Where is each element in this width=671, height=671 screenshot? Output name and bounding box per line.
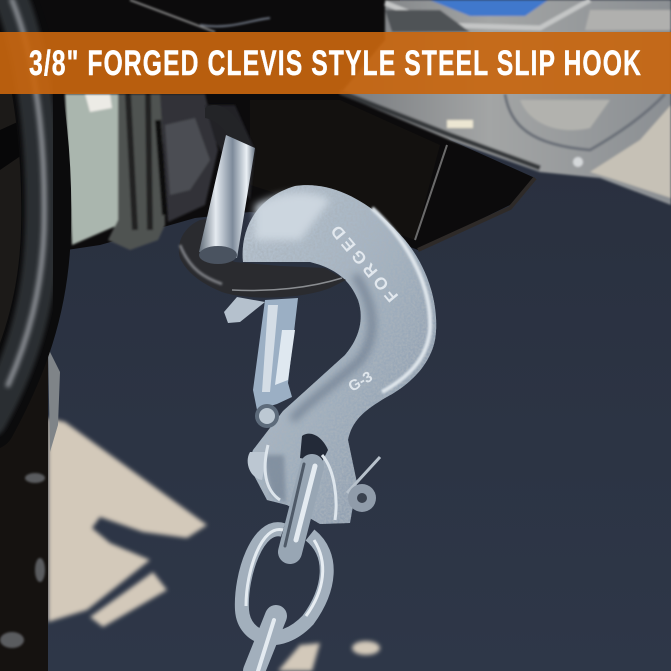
clevis pin and cotter: [347, 457, 380, 512]
black cable loop: [0, 0, 46, 425]
forged slip hook: [243, 185, 436, 524]
sunlit concrete patches: [48, 418, 380, 671]
grade mark on hook: G-3: [346, 368, 376, 395]
chrome bumper: [130, 0, 671, 205]
top orange title banner: [0, 32, 671, 94]
bracket edge highlight: [415, 145, 447, 240]
galvanized tube and black hitch bracket: [65, 94, 255, 250]
black truck underside: [0, 0, 535, 260]
black steel plate: [179, 218, 346, 298]
chain link two: [242, 529, 327, 638]
chain link one: [285, 464, 315, 552]
hook latch: [224, 297, 298, 410]
forged lettering on hook: FORGED: [327, 221, 402, 306]
chain link three: [254, 616, 276, 671]
latch bolt: [255, 404, 279, 428]
black frame post: [0, 94, 60, 671]
steel hitch pin: [199, 105, 255, 264]
clevis opening: [300, 434, 328, 462]
